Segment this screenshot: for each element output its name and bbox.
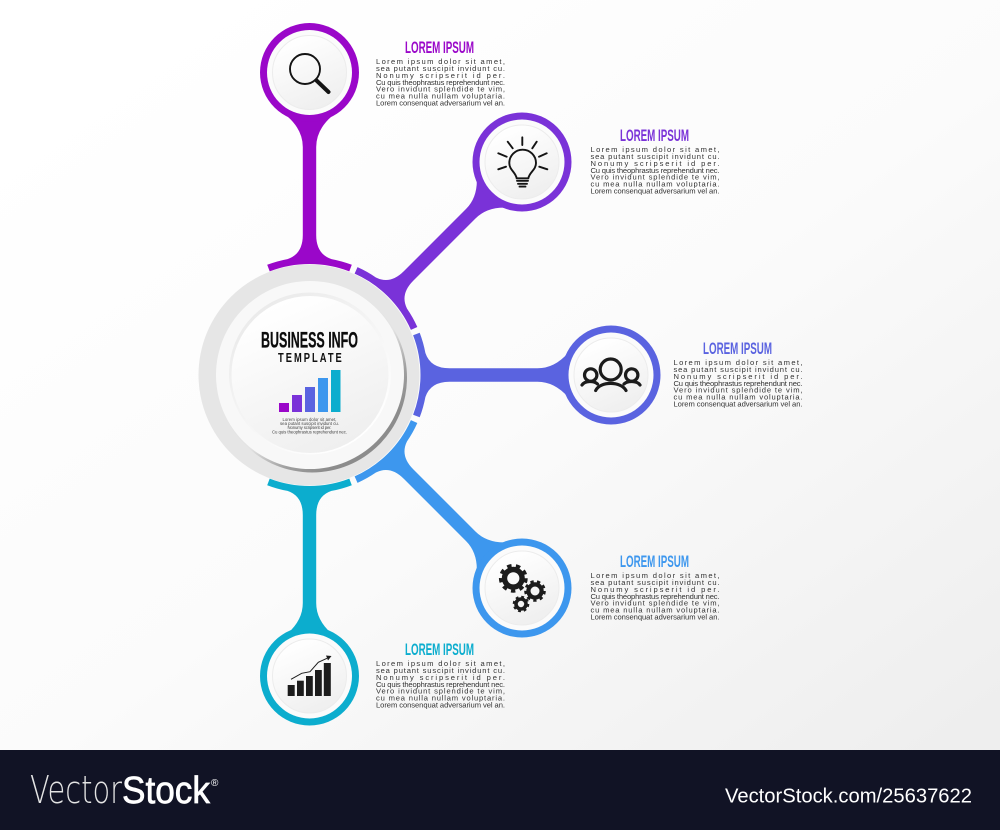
connector: violet (353, 162, 522, 332)
body: Nonumy scripserit id per. (674, 372, 802, 381)
body: sea putant suscipit invidunt cu. (590, 152, 720, 161)
hub caption: sea putant suscipit invidunt cu. (280, 421, 339, 426)
body: Lorem consenquat adversarium vel an. (376, 700, 505, 710)
footer logo: Stock: Stock (122, 770, 211, 812)
footer band (0, 750, 1000, 830)
body: cu mea nulla nullam voluptaria. (590, 606, 720, 615)
body: Cu quis theophrastus reprehendunt nec. (376, 680, 505, 689)
body: cu mea nulla nullam voluptaria. (376, 92, 505, 101)
body (376, 57, 505, 108)
body: Nonumy scripserit id per. (376, 673, 505, 682)
body (674, 358, 802, 408)
icon: magnifier (290, 54, 328, 92)
heading: LOREM IPSUM (405, 39, 474, 57)
body: Lorem consenquat adversarium vel an. (674, 400, 802, 408)
connector: teal (267, 479, 352, 634)
hub bar chart (279, 370, 340, 412)
body: Cu quis theophrastus reprehendunt nec. (590, 592, 720, 601)
hub caption: Lorem ipsum dolor sit amet, (282, 417, 336, 422)
connector: blue (413, 333, 568, 417)
body: Nonumy scripserit id per. (590, 585, 720, 594)
connector: purple (267, 116, 352, 271)
body: sea putant suscipit invidunt cu. (590, 578, 720, 587)
body (376, 659, 505, 710)
text block: item 4 (590, 553, 720, 622)
body: Lorem ipsum dolor sit amet, (376, 57, 505, 66)
body: Lorem ipsum dolor sit amet, (376, 659, 505, 668)
body: cu mea nulla nullam voluptaria. (376, 694, 505, 703)
footer id: VectorStock.com/25637622 (725, 784, 972, 808)
node: settings (472, 538, 572, 638)
body: sea putant suscipit invidunt cu. (674, 365, 802, 374)
body: Vero invidunt splendide te vim, (590, 173, 720, 182)
hub caption: Nonumy scripserit id per. (288, 425, 332, 430)
node: team (562, 326, 660, 424)
body: sea putant suscipit invidunt cu. (376, 666, 505, 675)
node: search (260, 23, 359, 122)
hub caption (272, 417, 347, 434)
connector: light blue (353, 418, 522, 588)
body: Nonumy scripserit id per. (376, 71, 505, 80)
icon: people (582, 359, 640, 390)
body (590, 145, 720, 196)
hub caption: Cu quis theophrastus reprehendunt nec. (272, 430, 347, 434)
body: cu mea nulla nullam voluptaria. (674, 393, 802, 402)
heading: LOREM IPSUM (620, 553, 689, 571)
heading: LOREM IPSUM (703, 340, 772, 358)
text block: item 3 (674, 340, 802, 408)
body: Cu quis theophrastus reprehendunt nec. (590, 166, 720, 175)
footer logo: Vector: Vector (30, 768, 122, 812)
heading: LOREM IPSUM (405, 641, 474, 659)
body: Cu quis theophrastus reprehendunt nec. (376, 78, 505, 87)
body: Vero invidunt splendide te vim, (376, 85, 505, 94)
registered mark: ® (211, 778, 219, 789)
hub subtitle: TEMPLATE (278, 352, 344, 365)
body: Nonumy scripserit id per. (590, 159, 720, 168)
body: sea putant suscipit invidunt cu. (376, 64, 505, 73)
body: Lorem consenquat adversarium vel an. (590, 612, 720, 622)
hub title: BUSINESS INFO (261, 328, 358, 352)
text block: item 1 (376, 39, 505, 108)
body: Vero invidunt splendide te vim, (590, 599, 720, 608)
body (590, 571, 720, 622)
node: idea (472, 112, 572, 212)
icon: gears (501, 566, 544, 611)
text block: item 2 (590, 127, 720, 196)
body: Vero invidunt splendide te vim, (674, 386, 802, 395)
node: growth (260, 626, 359, 726)
body: Lorem ipsum dolor sit amet, (590, 145, 720, 154)
body: Lorem ipsum dolor sit amet, (674, 358, 802, 367)
body: Cu quis theophrastus reprehendunt nec. (674, 379, 802, 388)
icon: light bulb (498, 137, 547, 187)
central hub (198, 264, 420, 486)
body: Vero invidunt splendide te vim, (376, 687, 505, 696)
text block: item 5 (376, 641, 505, 710)
heading: LOREM IPSUM (620, 127, 689, 145)
body: Lorem consenquat adversarium vel an. (590, 186, 720, 196)
body: cu mea nulla nullam voluptaria. (590, 180, 720, 189)
body: Lorem ipsum dolor sit amet, (590, 571, 720, 580)
body: Lorem consenquat adversarium vel an. (376, 98, 505, 108)
icon: growth chart (288, 656, 332, 696)
